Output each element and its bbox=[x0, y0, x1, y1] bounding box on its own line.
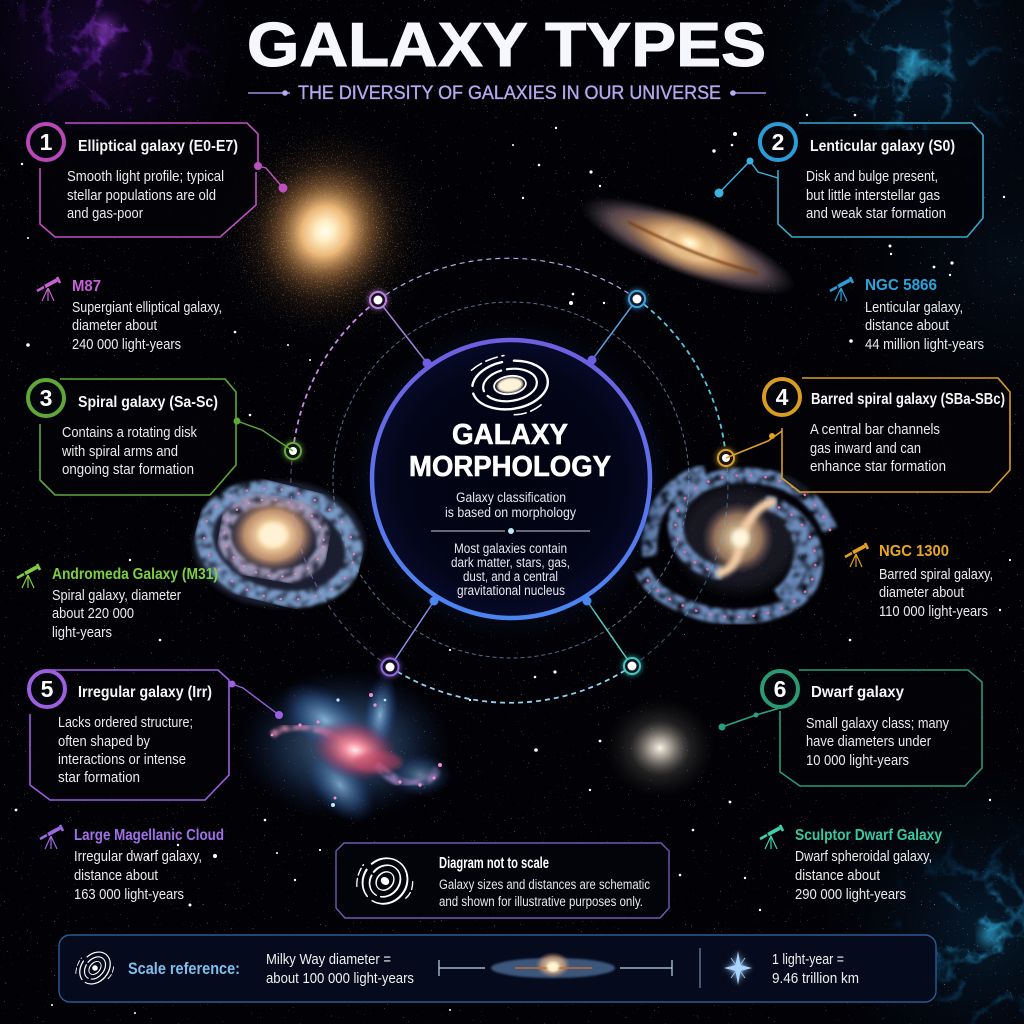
panel 5: irregular bbox=[29, 670, 283, 800]
fact: Andromeda: light-years bbox=[52, 624, 112, 641]
fact: NGC 5866 bbox=[830, 277, 984, 353]
fact: NGC 1300: NGC 1300 bbox=[879, 543, 949, 560]
fact: Large Magellanic Cloud: distance about bbox=[74, 867, 159, 884]
panel 5: irregular: 5 bbox=[41, 676, 54, 702]
scale line bbox=[439, 960, 672, 976]
panel 3: spiral: Spiral galaxy (Sa-Sc) bbox=[78, 394, 218, 411]
fact: NGC 5866: NGC 5866 bbox=[865, 277, 937, 294]
fact: NGC 1300: diameter about bbox=[879, 584, 965, 601]
callout: diagram not to scale: Diagram not to scale bbox=[439, 855, 549, 872]
panel 6: dwarf: Small galaxy class; many bbox=[806, 715, 949, 732]
panel 6: dwarf: 6 bbox=[774, 676, 786, 702]
panel 5: irregular: interactions or intense bbox=[58, 751, 186, 768]
callout: diagram not to scale bbox=[336, 843, 669, 918]
fact: NGC 1300 bbox=[845, 543, 993, 620]
fact: NGC 1300: Barred spiral galaxy, bbox=[879, 566, 993, 583]
panel 4: barred spiral: 4 bbox=[776, 384, 789, 410]
fact: Andromeda: Andromeda Galaxy (M31) bbox=[52, 566, 218, 583]
panel 5: irregular: Irregular galaxy (Irr) bbox=[78, 684, 212, 701]
panel 6: dwarf bbox=[718, 670, 982, 786]
fact: Sculptor Dwarf Galaxy: Sculptor Dwarf Galaxy bbox=[795, 827, 942, 844]
panel 2: lenticular bbox=[714, 123, 983, 237]
connector 4 bbox=[726, 431, 782, 458]
icon: galaxy emblem bbox=[468, 350, 552, 420]
panel 3: spiral: ongoing star formation bbox=[62, 461, 194, 478]
fact: NGC 5866: Lenticular galaxy, bbox=[865, 299, 963, 316]
icon: galaxy bbox=[349, 846, 421, 917]
panel 2: lenticular: and weak star formation bbox=[806, 205, 946, 222]
panel 1: elliptical: 1 bbox=[40, 129, 53, 155]
panel 2: lenticular: Disk and bulge present, bbox=[806, 168, 938, 185]
connector 5 bbox=[228, 680, 283, 719]
subtitle: THE DIVERSITY OF GALAXIES IN OUR UNIVERSE bbox=[298, 83, 721, 104]
fact: Andromeda: Spiral galaxy, diameter bbox=[52, 587, 181, 604]
fact: NGC 1300: 110 000 light-years bbox=[879, 603, 988, 620]
title: GALAXY TYPES bbox=[247, 11, 766, 80]
fact: M87: Supergiant elliptical galaxy, bbox=[72, 299, 222, 316]
galaxy: barred spiral bbox=[642, 472, 830, 617]
panel 5: irregular: Lacks ordered structure; bbox=[58, 714, 193, 731]
galaxy: irregular bbox=[240, 667, 452, 836]
fact: Sculptor Dwarf Galaxy: 290 000 light-years bbox=[795, 886, 906, 903]
scale reference bar: Milky Way diameter = bbox=[266, 951, 391, 968]
panel 2: lenticular: but little interstellar gas bbox=[806, 187, 940, 204]
connector 2 bbox=[714, 158, 778, 198]
panel 4: barred spiral: enhance star formation bbox=[810, 458, 946, 475]
panel 1: elliptical bbox=[28, 123, 288, 237]
hub text: dark matter, stars, gas, bbox=[451, 555, 570, 570]
scale reference bar: 9.46 trillion km bbox=[772, 970, 859, 987]
icon: scale galaxy bbox=[71, 944, 119, 992]
fact: M87: 240 000 light-years bbox=[72, 336, 181, 353]
hub text bbox=[431, 490, 590, 598]
panel 1: elliptical: stellar populations are old bbox=[67, 187, 216, 204]
icon: edge-on Milky Way bbox=[491, 952, 615, 978]
connector 3 bbox=[234, 418, 293, 451]
panel 4: barred spiral: gas inward and can bbox=[810, 440, 921, 457]
orbit rings bbox=[291, 258, 728, 703]
fact: NGC 5866: distance about bbox=[865, 317, 950, 334]
galaxy: elliptical bbox=[215, 122, 434, 342]
panel 1: elliptical: and gas-poor bbox=[67, 205, 143, 222]
connector 6 bbox=[718, 708, 780, 730]
fact: Large Magellanic Cloud: Large Magellanic Cloud bbox=[74, 827, 224, 844]
panel 3: spiral: 3 bbox=[40, 385, 52, 411]
panel 2: lenticular: 2 bbox=[772, 129, 784, 155]
scale reference bar: Scale reference: bbox=[128, 959, 240, 978]
fact: Andromeda: about 220 000 bbox=[52, 605, 134, 622]
orbit nodes bbox=[285, 291, 734, 676]
hub text: dust, and a central bbox=[463, 569, 558, 584]
panel 5: irregular: often shaped by bbox=[58, 733, 150, 750]
panel 2: lenticular: Lenticular galaxy (S0) bbox=[810, 138, 955, 155]
hub heading: GALAXY bbox=[452, 419, 568, 451]
fact: M87 bbox=[37, 277, 222, 353]
hub text: is based on morphology bbox=[445, 505, 576, 520]
panel 1: elliptical: Smooth light profile; typical bbox=[67, 168, 224, 185]
hub text: Most galaxies contain bbox=[454, 541, 567, 556]
connector 1 bbox=[254, 162, 288, 192]
panel 3: spiral: Contains a rotating disk bbox=[62, 424, 197, 441]
hub text: gravitational nucleus bbox=[457, 583, 565, 598]
galaxy: dwarf bbox=[605, 698, 715, 798]
panel 3: spiral: with spiral arms and bbox=[61, 443, 178, 460]
panel 5: irregular: star formation bbox=[58, 769, 140, 786]
hub heading bbox=[409, 419, 611, 483]
hub text: Galaxy classification bbox=[456, 490, 566, 505]
panel 1: elliptical: Elliptical galaxy (E0-E7) bbox=[78, 138, 238, 155]
fact: Sculptor Dwarf Galaxy: Dwarf spheroidal galaxy, bbox=[795, 848, 932, 865]
fact: M87: diameter about bbox=[72, 317, 158, 334]
panel 3: spiral bbox=[28, 379, 293, 495]
central hub bbox=[351, 320, 671, 640]
panel 4: barred spiral: A central bar channels bbox=[810, 421, 940, 438]
fact: Large Magellanic Cloud: 163 000 light-years bbox=[74, 886, 184, 903]
fact: M87: M87 bbox=[72, 278, 101, 295]
fact: Andromeda bbox=[17, 564, 218, 641]
fact: Large Magellanic Cloud bbox=[40, 825, 224, 903]
galaxy: spiral bbox=[192, 473, 366, 615]
fact: Sculptor Dwarf Galaxy bbox=[760, 825, 942, 903]
panel 6: dwarf: 10 000 light-years bbox=[806, 752, 909, 769]
galaxy: lenticular bbox=[571, 178, 805, 314]
callout: diagram not to scale: Galaxy sizes and distances are schematic bbox=[439, 877, 650, 892]
panel 6: dwarf: Dwarf galaxy bbox=[811, 684, 904, 701]
panel 6: dwarf: have diameters under bbox=[806, 733, 931, 750]
fact: NGC 5866: 44 million light-years bbox=[865, 336, 984, 353]
scale reference bar: about 100 000 light-years bbox=[266, 970, 414, 987]
scale reference bar: 1 light-year = bbox=[772, 951, 844, 968]
fact: Sculptor Dwarf Galaxy: distance about bbox=[795, 867, 881, 884]
hub heading: MORPHOLOGY bbox=[409, 451, 611, 483]
callout: diagram not to scale: and shown for illustrative purposes only. bbox=[439, 894, 643, 909]
icon: star bbox=[724, 951, 752, 985]
panel 4: barred spiral bbox=[726, 378, 1010, 492]
fact: Large Magellanic Cloud: Irregular dwarf galaxy, bbox=[74, 848, 202, 865]
scale reference bar bbox=[59, 935, 936, 1002]
spokes to nodes bbox=[378, 299, 637, 667]
